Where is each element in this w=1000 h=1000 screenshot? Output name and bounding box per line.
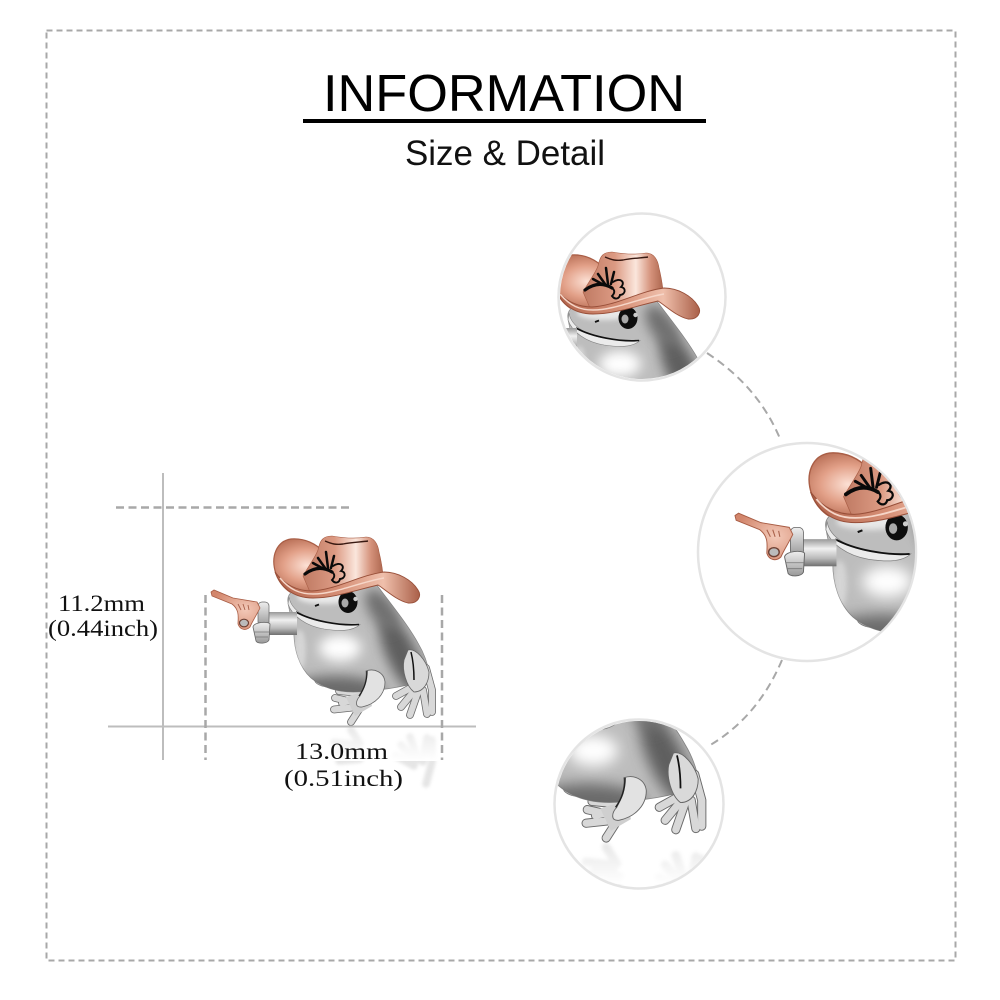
height label: (0.44inch) <box>48 616 158 641</box>
detail circle: arm and pistol <box>696 442 918 662</box>
dimension guide lines <box>108 473 476 760</box>
subtitle: Size & Detail <box>405 134 605 173</box>
title: INFORMATION <box>323 65 685 123</box>
frog charm product <box>211 536 445 784</box>
width label: (0.51inch) <box>284 766 403 791</box>
title underline <box>303 119 706 123</box>
dimension diagram <box>48 473 476 791</box>
width label <box>284 739 403 791</box>
detail circle: feet <box>553 718 725 890</box>
width label: 13.0mm <box>295 739 388 764</box>
detail circle: hat <box>557 212 727 382</box>
dashed connector arcs <box>707 353 782 747</box>
height label: 11.2mm <box>58 591 145 616</box>
height label <box>48 591 158 641</box>
